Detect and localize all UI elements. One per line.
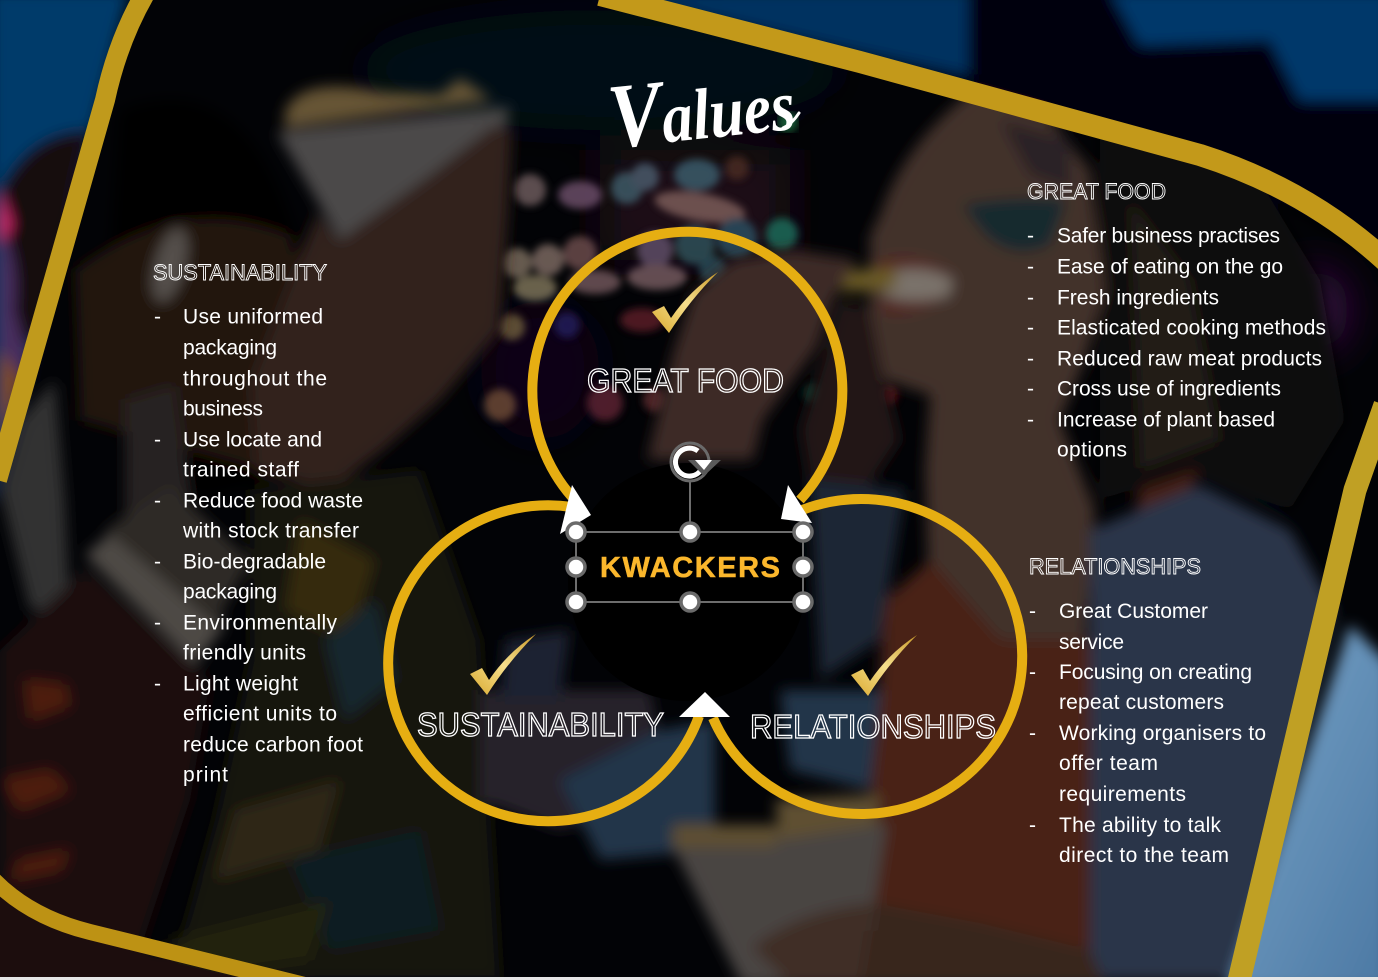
list: sustainability: - <box>154 429 161 452</box>
list: great food: - <box>1027 317 1034 340</box>
list: great food: Ease of eating on the go <box>1057 256 1283 279</box>
bokeh lights <box>514 174 546 206</box>
list: sustainability: business <box>183 398 263 421</box>
jacket <box>1090 485 1335 980</box>
title: Values <box>603 47 799 168</box>
list: relationships: The ability to talk <box>1059 814 1222 837</box>
list: relationships: offer team <box>1059 752 1158 775</box>
heading: sustainability: SUSTAINABILITY <box>153 260 327 285</box>
list: relationships: Working organisers to <box>1059 722 1266 745</box>
left hand <box>250 125 512 490</box>
orange top <box>860 560 1090 950</box>
list: great food: - <box>1027 378 1034 401</box>
list: great food: - <box>1027 225 1034 248</box>
list: relationships: - <box>1029 661 1036 684</box>
woman hair and neck shadow <box>1100 120 1345 510</box>
list: relationships: direct to the team <box>1059 844 1229 867</box>
list: sustainability: Reduce food waste <box>183 490 363 513</box>
top left outside: blue wall and person <box>0 0 130 510</box>
left person hair and face <box>100 100 330 500</box>
list: sustainability: with stock transfer <box>182 520 359 543</box>
label: relationships: RELATIONSHIPS <box>750 708 996 745</box>
list: relationships: - <box>1029 600 1036 623</box>
list: relationships: service <box>1059 631 1124 654</box>
label: great food: GREAT FOOD <box>587 362 784 399</box>
left cone and fries <box>285 78 492 128</box>
bottom right outside: denim <box>1228 625 1378 980</box>
list: great food: Fresh ingredients <box>1057 287 1219 310</box>
list: sustainability <box>154 306 363 787</box>
list: relationships: - <box>1029 814 1036 837</box>
arrow: to great food right <box>781 485 812 523</box>
list: relationships: requirements <box>1059 783 1186 806</box>
woman arm and hand <box>647 250 857 460</box>
centre shirt and denim <box>480 690 670 830</box>
brand name: KWACKERS <box>600 552 780 584</box>
list: sustainability: Use uniformed <box>183 306 323 329</box>
list: great food: Reduced raw meat products <box>1057 348 1322 371</box>
check mark: great food <box>652 272 718 333</box>
bottom cone and fries <box>673 823 887 980</box>
list: sustainability: packaging <box>183 337 277 360</box>
list: sustainability: trained staff <box>183 459 299 482</box>
left knit sweater <box>0 570 210 980</box>
list: sustainability: - <box>154 306 161 329</box>
woman face and neck <box>868 85 1105 640</box>
text block: relationships <box>1029 554 1266 867</box>
list: sustainability: print <box>183 764 228 787</box>
list: relationships: - <box>1029 722 1036 745</box>
list: sustainability: efficient units to <box>183 703 337 726</box>
heading: great food: GREAT FOOD <box>1027 179 1166 204</box>
icon: rotate handle <box>671 443 721 481</box>
list: relationships <box>1029 600 1266 867</box>
bottom left outside <box>0 885 320 980</box>
selection box around brand <box>567 443 812 611</box>
list: sustainability: friendly units <box>183 642 306 665</box>
list: great food: Cross use of ingredients <box>1057 378 1281 401</box>
top right outside: sky and tree <box>590 0 1378 265</box>
list: great food: - <box>1027 256 1034 279</box>
central black circle <box>568 463 806 701</box>
list: sustainability: - <box>154 490 161 513</box>
circle: relationships <box>713 499 1022 814</box>
list: great food: Increase of plant based <box>1057 409 1275 432</box>
text block: sustainability <box>153 260 363 787</box>
bottom page edge <box>0 977 1378 980</box>
text block: great food <box>1027 179 1326 462</box>
list: great food <box>1027 225 1326 462</box>
left white shirt <box>0 380 70 610</box>
circle: great food <box>532 232 842 500</box>
list: relationships: repeat customers <box>1059 691 1224 714</box>
label: sustainability: SUSTAINABILITY <box>417 706 664 743</box>
list: relationships: Great Customer <box>1059 600 1208 623</box>
list: great food: Safer business practises <box>1057 225 1280 248</box>
list: sustainability: throughout the <box>183 368 327 391</box>
list: sustainability: Light weight <box>183 673 298 696</box>
list: sustainability: - <box>154 673 161 696</box>
list: sustainability: packaging <box>183 581 277 604</box>
list: sustainability: Use locate and <box>183 429 322 452</box>
list: sustainability: reduce carbon foot <box>183 734 363 757</box>
list: great food: - <box>1027 409 1034 432</box>
list: great food: options <box>1057 439 1127 462</box>
list: relationships: Focusing on creating <box>1059 661 1252 684</box>
list: great food: - <box>1027 348 1034 371</box>
list: sustainability: - <box>154 612 161 635</box>
arrow: to great food left <box>560 485 591 534</box>
arrow: bottom <box>679 692 730 717</box>
circle: sustainability <box>388 505 699 821</box>
heading: relationships: RELATIONSHIPS <box>1029 554 1201 579</box>
check mark: relationships <box>851 635 917 696</box>
check mark: sustainability <box>470 634 536 695</box>
list: great food: Elasticated cooking methods <box>1057 317 1326 340</box>
list: sustainability: - <box>154 551 161 574</box>
sky glow <box>360 10 840 130</box>
list: sustainability: Environmentally <box>183 612 338 635</box>
list: sustainability: Bio-degradable <box>183 551 326 574</box>
colourful sweater pattern <box>170 470 500 980</box>
bottom hand <box>752 903 1105 980</box>
list: great food: - <box>1027 287 1034 310</box>
